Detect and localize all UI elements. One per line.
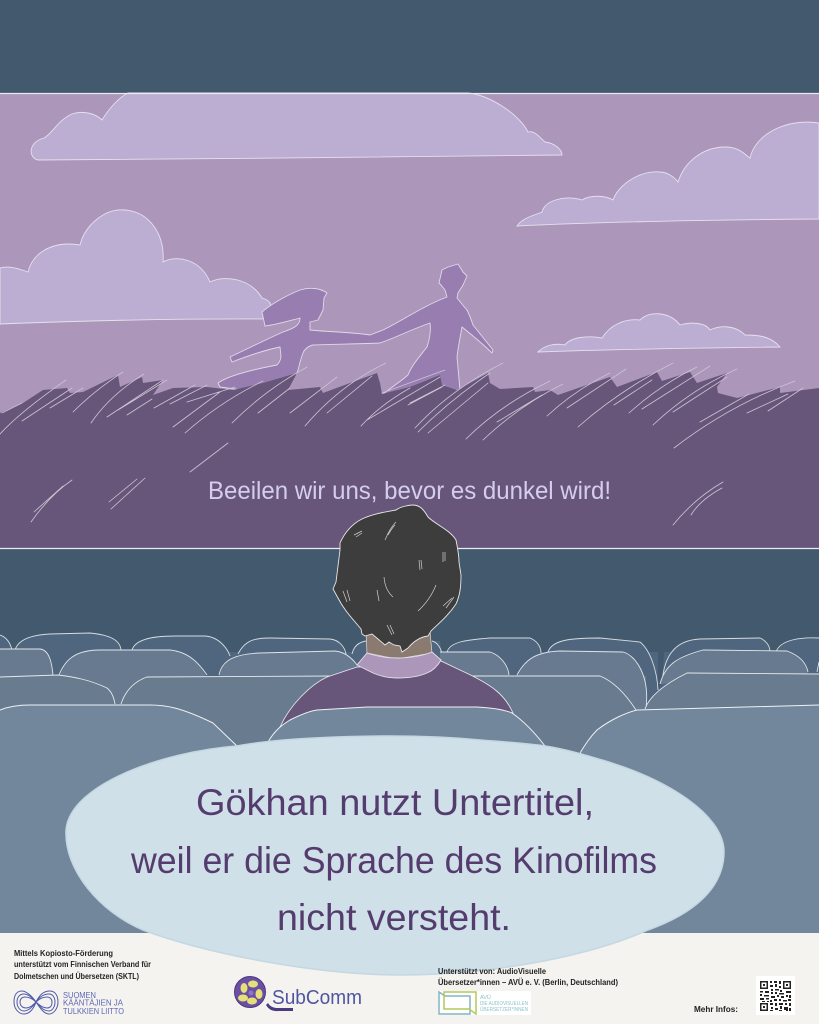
neck: [366, 632, 432, 659]
more info label: Mehr Infos:: [694, 1004, 738, 1014]
grass strokes: [0, 363, 803, 525]
bubble text line 1: Gökhan nutzt Untertitel,: [196, 782, 594, 823]
QR modules: [760, 981, 791, 1011]
hair highlights: [343, 522, 454, 635]
QR code: [756, 976, 795, 1015]
logo wordmark: ÜBERSETZER*INNEN: [480, 1006, 528, 1013]
logo wordmark: DIE AUDIOVISUELLEN: [480, 1001, 528, 1007]
footer note: Kopiosto funding: Dolmetschen und Übersetzen (SKTL): [14, 972, 139, 981]
hair: [333, 505, 461, 652]
footer note: AVÜ support: Übersetzer*innen – AVÜ e. V. (Berlin, Deutschland): [438, 978, 618, 987]
subtitle on screen: Beeilen wir uns, bevor es dunkel wird!: [208, 477, 611, 505]
footer note: Kopiosto funding: [14, 949, 151, 981]
shirt: [280, 661, 513, 727]
silhouette: girl and boy holding hands: [218, 264, 493, 395]
footer strip: [0, 933, 819, 1024]
seats: front row: [0, 705, 819, 940]
logo wordmark: AVÜ: [480, 994, 491, 1001]
icon: overlapping frames: [439, 992, 470, 1014]
seats: back row: [0, 633, 819, 722]
screen bottom edge: [0, 94, 819, 548]
speech bubble: [66, 736, 724, 975]
footer note: AVÜ support: Unterstützt von: AudioVisuelle: [438, 967, 547, 976]
bubble shape: [66, 736, 724, 975]
icon: film reel: [234, 976, 293, 1011]
screen sky: [0, 93, 819, 548]
QR background: [756, 976, 795, 1015]
ground: dark grass field: [0, 372, 819, 548]
icon: interlaced loops: [14, 991, 58, 1014]
footer note: AVÜ support: [438, 967, 618, 987]
panel: cinema screen: [0, 93, 819, 548]
logo wordmark: TULKKIEN LIITTO: [63, 1007, 124, 1016]
cloud: top right: [517, 122, 819, 226]
seats: third row: [0, 673, 819, 940]
logo background: [438, 991, 531, 1015]
wordmark: SubComm: [272, 987, 362, 1009]
logo wordmark: KÄÄNTÄJIEN JA: [63, 998, 124, 1008]
logo wordmark: SUOMEN: [63, 991, 96, 1000]
cloud: top centre: [31, 93, 562, 160]
logo: SubComm: [234, 976, 362, 1011]
cloud: small right: [538, 314, 780, 352]
person: viewer from behind: [280, 505, 513, 727]
logo wordmark: [480, 994, 528, 1013]
logo: AVÜ: [438, 991, 531, 1015]
seats: second row: [0, 649, 819, 736]
logo wordmark: [63, 991, 124, 1016]
footer note: Kopiosto funding: Mittels Kopiosto-Förderung: [14, 949, 113, 958]
footer note: Kopiosto funding: unterstützt vom Finnischen Verband für: [14, 960, 151, 969]
logo: SKTL: [14, 991, 124, 1016]
bubble text line 3: nicht versteht.: [277, 897, 511, 938]
cloud: left: [0, 210, 272, 324]
collar: [357, 652, 441, 678]
bubble text line 2: weil er die Sprache des Kinofilms: [130, 840, 657, 881]
